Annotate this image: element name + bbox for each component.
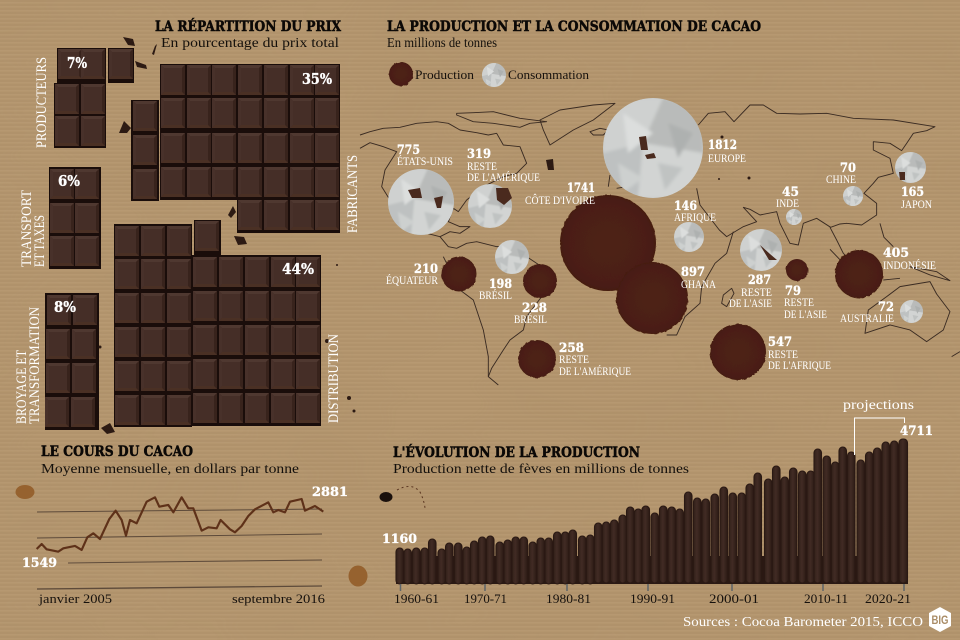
- side label: fabricants: FABRICANTS: [345, 155, 361, 233]
- side label: transport et taxes: [19, 190, 48, 267]
- chocolate bar: transport et taxes 6%: [49, 167, 101, 269]
- title: production et consommation: En millions de tonnes: [387, 36, 497, 51]
- chocolate bar: distribution 44%: [114, 220, 321, 427]
- chocolate bar: producteurs 7%: 7%: [67, 54, 87, 72]
- data labels: Asie et Océanie: 165: [901, 185, 924, 200]
- projections bracket: 4711: [900, 424, 933, 439]
- data labels: Asie et Océanie: 72: [878, 300, 894, 315]
- chocolate bar: broyage et transformation 8%: 8%: [54, 298, 76, 316]
- data labels: Asie et Océanie: [729, 161, 936, 325]
- data labels: Amériques: RESTE: [467, 161, 497, 173]
- title: évolution de la production: [393, 445, 689, 477]
- cocoa stains: [16, 485, 368, 586]
- consumption foil circles: [388, 98, 926, 323]
- data labels: Afrique et Europe: GHANA: [681, 279, 717, 291]
- line chart: cours du cacao: septembre 2016: [232, 592, 325, 606]
- data labels: Amériques: RESTE: [559, 354, 589, 366]
- data labels: Amériques: 198: [489, 277, 512, 292]
- chocolate crumbs: [98, 37, 750, 434]
- title: la répartition du prix: [155, 19, 341, 51]
- projections bracket: [843, 398, 933, 455]
- title: production et consommation: LA PRODUCTION ET LA CONSOMMATION DE CACAO: [387, 19, 761, 35]
- data labels: Amériques: 775: [397, 143, 420, 158]
- side label: transport et taxes: ET TAXES: [32, 215, 48, 267]
- line chart: cours du cacao: janvier 2005: [38, 592, 112, 606]
- side label: distribution: DISTRIBUTION: [326, 334, 342, 423]
- data labels: Amériques: [386, 143, 631, 378]
- legend: Production: [415, 68, 475, 82]
- bar chart: chocolate sticks: [396, 439, 908, 584]
- data labels: Afrique et Europe: 1812: [708, 138, 737, 153]
- data labels: Amériques: ÉQUATEUR: [386, 273, 438, 287]
- title: le cours du cacao: LE COURS DU CACAO: [41, 444, 193, 460]
- x axis: years: 2010-11: [804, 592, 848, 606]
- world map outline: [360, 103, 960, 385]
- data labels: Asie et Océanie: 45: [782, 185, 799, 200]
- title: le cours du cacao: Moyenne mensuelle, en dollars par tonne: [41, 462, 299, 477]
- data labels: Asie et Océanie: DE L'ASIE: [729, 298, 772, 310]
- x axis: years: 2020-21: [865, 592, 911, 606]
- chocolate bar: broyage et transformation 8%: [45, 293, 99, 430]
- data labels: Asie et Océanie: 70: [840, 161, 856, 176]
- line chart: cours du cacao: 2881: [312, 485, 348, 500]
- projections bracket: projections: [843, 398, 914, 413]
- title: évolution de la production: L'ÉVOLUTION DE LA PRODUCTION: [393, 445, 640, 461]
- line chart: cours du cacao: 1549: [22, 556, 57, 571]
- legend: [389, 62, 590, 87]
- data labels: Afrique et Europe: RESTE: [768, 349, 798, 361]
- data labels: Asie et Océanie: RESTE: [741, 287, 772, 299]
- data labels: Afrique et Europe: 146: [674, 199, 697, 214]
- data labels: Afrique et Europe: 547: [768, 335, 792, 350]
- data labels: Amériques: BRÉSIL: [514, 312, 547, 326]
- data labels: Amériques: 210: [414, 262, 438, 277]
- data labels: Amériques: 228: [522, 301, 547, 316]
- data labels: Asie et Océanie: 287: [748, 273, 771, 288]
- title: le cours du cacao: [41, 444, 299, 477]
- title: évolution de la production: Production nette de fèves en millions de tonnes: [393, 462, 689, 477]
- ink drop: [380, 486, 425, 508]
- production circles: [442, 195, 883, 380]
- side label: transport et taxes: TRANSPORT: [19, 190, 35, 267]
- chocolate bar: fabricants 35%: 35%: [302, 70, 332, 88]
- data labels: Amériques: 258: [559, 341, 584, 356]
- icon: logo: [929, 607, 951, 632]
- legend: Consommation: [508, 68, 590, 82]
- data labels: Afrique et Europe: DE L'AFRIQUE: [768, 360, 831, 372]
- x axis: years: 1980-81: [546, 592, 591, 606]
- sources: Sources : Cocoa Barometer 2015, ICCO: [683, 615, 923, 630]
- data labels: Amériques: BRÉSIL: [479, 288, 512, 302]
- data labels: Asie et Océanie: DE L'ASIE: [784, 309, 827, 321]
- x axis: years: 2000-01: [709, 592, 759, 606]
- data labels: Amériques: ÉTATS-UNIS: [397, 154, 453, 168]
- chocolate bar: distribution 44%: 44%: [282, 260, 314, 278]
- data labels: Afrique et Europe: CÔTE D'IVOIRE: [525, 193, 595, 207]
- chocolate bar: producteurs 7%: [54, 48, 134, 148]
- side label: broyage et transformation: TRANSFORMATION: [27, 307, 43, 424]
- title: la répartition du prix: En pourcentage du prix total: [161, 36, 339, 51]
- data labels: Afrique et Europe: EUROPE: [708, 153, 746, 165]
- data labels: Amériques: DE L'AMÉRIQUE: [559, 364, 631, 378]
- data labels: Afrique et Europe: 897: [681, 265, 705, 280]
- x axis: years: [394, 584, 911, 606]
- side label: producteurs: PRODUCTEURS: [34, 57, 50, 148]
- icon: logo: BIG: [932, 613, 948, 627]
- side label: broyage et transformation: BROYAGE ET: [14, 350, 30, 424]
- line chart: cours du cacao: [22, 485, 348, 606]
- data labels: Afrique et Europe: AFRIQUE: [674, 212, 716, 224]
- data labels: Asie et Océanie: 79: [785, 284, 801, 299]
- title: la répartition du prix: LA RÉPARTITION DU PRIX: [155, 19, 341, 35]
- x axis: years: 1960-61: [394, 592, 439, 606]
- value label: 1160: 1160: [382, 532, 417, 547]
- data labels: Asie et Océanie: 405: [883, 246, 909, 261]
- chocolate bar: fabricants 35%: [131, 64, 340, 233]
- data labels: Amériques: 319: [467, 147, 491, 162]
- data labels: Asie et Océanie: INDONÉSIE: [883, 258, 936, 272]
- data labels: Asie et Océanie: CHINE: [826, 174, 856, 186]
- data labels: Asie et Océanie: JAPON: [901, 199, 933, 211]
- data labels: Asie et Océanie: RESTE: [784, 297, 814, 309]
- x axis: years: 1970-71: [464, 592, 507, 606]
- x axis: years: 1990-91: [630, 592, 675, 606]
- data labels: Amériques: DE L'AMÉRIQUE: [467, 170, 540, 184]
- chocolate bar: transport et taxes 6%: 6%: [58, 172, 80, 190]
- data labels: Asie et Océanie: INDE: [776, 198, 799, 210]
- data labels: Afrique et Europe: [525, 138, 831, 372]
- title: production et consommation: [387, 19, 761, 51]
- data labels: Afrique et Europe: 1741: [567, 181, 595, 196]
- side label: broyage et transformation: [14, 307, 43, 424]
- data labels: Asie et Océanie: AUSTRALIE: [840, 313, 894, 325]
